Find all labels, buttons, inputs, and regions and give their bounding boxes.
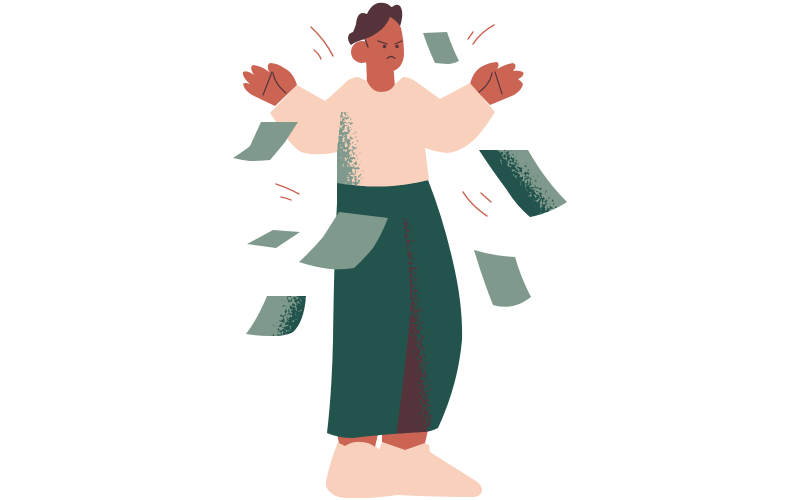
neck (366, 55, 395, 92)
left hand (243, 63, 297, 106)
motion lines (276, 25, 494, 216)
eyes (383, 45, 399, 48)
shoe: right (378, 442, 482, 497)
bill: centre (299, 212, 388, 269)
ear (351, 41, 373, 63)
sweater (270, 77, 495, 187)
bill: lower left with shading (246, 296, 306, 336)
trousers shading (396, 218, 436, 436)
head (348, 3, 404, 73)
ankle: right (382, 430, 428, 450)
eyebrows (378, 41, 402, 44)
bill: upper right with shading (479, 150, 567, 217)
mouth (387, 56, 395, 58)
right hand (470, 62, 523, 105)
bill: upper left (233, 122, 298, 161)
face (366, 17, 404, 73)
palm crease lines (263, 72, 286, 95)
bill: top (423, 32, 459, 64)
sweater shading (337, 112, 366, 185)
hair (348, 3, 402, 45)
illustration: frustrated man with flying paper bills (233, 2, 567, 498)
trousers (327, 180, 462, 438)
bill: small left (247, 230, 300, 248)
shoe: left (326, 442, 397, 498)
ankle: left (337, 434, 378, 447)
palm crease lines (479, 72, 502, 94)
hair strand (365, 39, 368, 47)
bill: lower right (474, 250, 531, 307)
